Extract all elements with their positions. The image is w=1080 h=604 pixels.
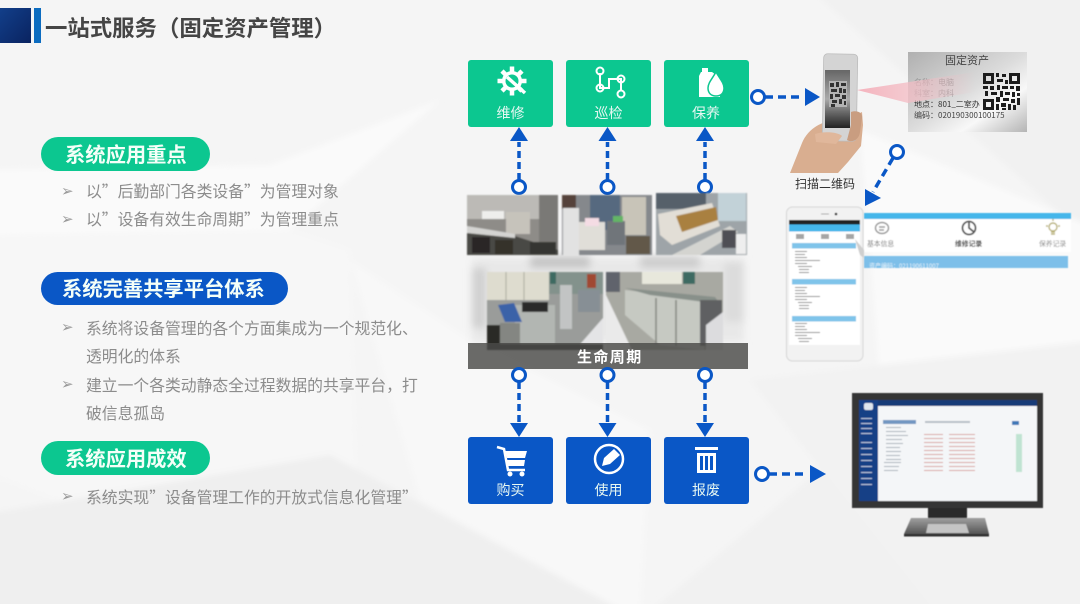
table rows [924, 421, 1022, 472]
caption band: 生命周期: 生命周期 [577, 346, 643, 367]
icon: gear and wrench [498, 66, 526, 96]
app bar [789, 224, 860, 232]
bullet list: focus: 以”后勤部门各类设备”为管理对象 [86, 179, 339, 202]
panel: system results [41, 441, 418, 508]
photo: lab bench [467, 195, 558, 255]
card fields [914, 77, 1005, 121]
bullet list: focus: ➢ [61, 182, 74, 200]
bullet list: results: ➢ [61, 487, 74, 505]
tree selection [883, 420, 916, 424]
panel: shared platform [41, 272, 418, 424]
card fields: 名称：电脑 [914, 77, 954, 88]
icon: bottle and drop [699, 68, 724, 97]
arrow: photos to 维修 [510, 127, 528, 194]
phone frame [786, 207, 863, 361]
phone body [822, 54, 858, 141]
icon: speech bubble [876, 222, 888, 234]
status bar [789, 220, 860, 224]
tab labels: 保养记录 [1039, 238, 1066, 248]
blurred photo backdrop [472, 256, 744, 342]
bullet list: platform: 破信息孤岛 [86, 401, 165, 424]
bullet list: focus: ➢ [61, 210, 74, 228]
top bar [859, 400, 1037, 406]
label: 扫描二维码: 扫描二维码 [795, 175, 855, 192]
bullet list: focus: 以”设备有效生命周期”为管理重点 [86, 207, 339, 230]
monitor stand [904, 507, 989, 536]
arrow: photos to 巡检 [598, 127, 616, 194]
caption band: 生命周期 [468, 343, 748, 369]
phone screen [825, 70, 850, 128]
logo [864, 403, 873, 410]
record bar [864, 256, 1068, 268]
sidebar menu [861, 418, 872, 485]
arrow: photos to 报废 [696, 368, 714, 437]
mobile phone app [786, 207, 864, 361]
heading pill: 系统应用重点: 系统应用重点 [65, 138, 187, 168]
card title: 固定资产 [945, 52, 989, 68]
monitor bezel [852, 393, 1043, 508]
arrow: photos to 购买 [510, 368, 528, 437]
title: 一站式服务（固定资产管理） [45, 11, 336, 43]
bullet list: focus [61, 179, 339, 230]
card fields: 地点：801_二室办 [914, 99, 980, 110]
icon: trash can [695, 447, 718, 473]
blue box: 购买 [468, 437, 553, 504]
icon: clock [962, 222, 976, 234]
QR on screen [829, 81, 847, 107]
photo: automated analyzer [656, 193, 747, 255]
card fields: 编码：020190300100175 [914, 110, 1005, 121]
arrow: disposal to monitor [756, 465, 826, 483]
icon: pencil in circle [595, 445, 623, 473]
green box: 维修: 维修 [496, 103, 524, 123]
sidebar [859, 400, 878, 501]
heading pill: 系统应用重点 [41, 137, 210, 171]
tab labels [867, 238, 1066, 248]
arrow: scan to mobile app [865, 146, 904, 206]
bullet list: platform: 建立一个各类动静态全过程数据的共享平台，打 [86, 373, 418, 396]
photo: lab room right [606, 272, 723, 350]
icon: light bulb [1046, 219, 1060, 234]
scan beam [857, 72, 975, 103]
panel: equipment photos [467, 193, 748, 369]
green box: 保养 [664, 60, 749, 127]
screen [789, 220, 860, 345]
tab labels: 基本信息 [867, 238, 894, 248]
bullet list: platform: 系统将设备管理的各个方面集成为一个规范化、 [86, 316, 418, 339]
header marker [0, 8, 41, 43]
tab icons [796, 234, 854, 239]
icon: shopping cart [497, 447, 527, 476]
blue box: 使用: 使用 [594, 480, 622, 500]
card fields: 科室：内科 [914, 88, 954, 99]
phone speaker [821, 213, 837, 215]
photo: analyzers [562, 195, 652, 255]
blue box: 报废: 报废 [692, 480, 720, 500]
tab labels: 维修记录 [955, 238, 982, 248]
panel: system application focus [41, 137, 339, 230]
bullet list: platform: ➢ [61, 375, 74, 393]
green box: 保养: 保养 [692, 103, 720, 123]
bullet list: platform: ➢ [61, 318, 74, 336]
green box: 巡检 [566, 60, 651, 127]
arrow: photos to 使用 [598, 368, 616, 437]
heading pill: 系统完善共享平台体系: 系统完善共享平台体系 [62, 272, 265, 302]
hand back [790, 112, 863, 173]
desktop monitor [852, 393, 1043, 536]
green box: 维修 [468, 60, 553, 127]
bullet list: platform [61, 316, 418, 424]
bullet list: results: 系统实现”设备管理工作的开放式信息化管理” [86, 485, 418, 508]
heading pill: 系统应用成效 [41, 441, 210, 475]
arrow: maintenance to phone scan [752, 88, 820, 106]
blue box: 使用 [566, 437, 651, 504]
icon: route [596, 68, 624, 98]
tree items [884, 427, 908, 471]
pointer notch [855, 239, 864, 258]
icon: QR code [983, 73, 1020, 110]
monitor screen [859, 400, 1037, 501]
photo: lab room left [487, 272, 603, 350]
asset label card [908, 52, 1027, 132]
arrow: photos to 保养 [696, 127, 714, 194]
blue box: 购买: 购买 [496, 480, 524, 500]
app detail panel: 资产编码：021190611007 [869, 261, 940, 270]
connectors: downward arrows [510, 368, 714, 437]
fingers [847, 111, 862, 141]
heading pill: 系统应用成效: 系统应用成效 [65, 442, 187, 472]
green box: 巡检: 巡检 [594, 103, 622, 123]
record list [792, 243, 856, 342]
phone scanning in hand [790, 54, 863, 173]
bullet list: platform: 透明化的体系 [86, 344, 181, 367]
blue box: 报废 [664, 437, 749, 504]
connectors: upward arrows [510, 127, 714, 194]
app detail panel [864, 213, 1071, 270]
